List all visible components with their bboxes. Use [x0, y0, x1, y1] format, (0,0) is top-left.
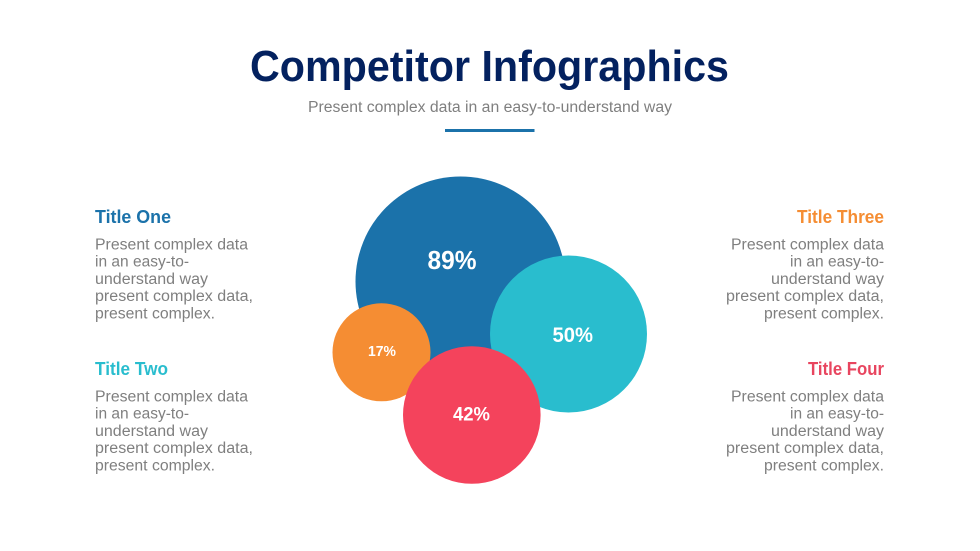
panel: title three [726, 207, 884, 322]
text block: title four: understand way [771, 423, 884, 440]
bubble chart [332, 176, 647, 484]
subtitle: Present complex data in an easy-to-understand way [308, 99, 672, 116]
header [250, 42, 729, 132]
text block: title two [95, 388, 253, 474]
text block: title four: present complex data, [726, 440, 884, 457]
text block: title three: Present complex data [731, 236, 884, 254]
accent rule [445, 129, 534, 132]
text block: title two: Present complex data [95, 388, 248, 406]
text block: title three: in an easy-to- [790, 254, 884, 271]
bubble: 50% [490, 256, 647, 412]
title: Competitor Infographics [250, 42, 729, 91]
text block: title one: in an easy-to- [95, 254, 189, 271]
bubble: 50%: 50% [552, 324, 593, 347]
text block: title three: understand way [771, 271, 884, 288]
text block: title four: in an easy-to- [790, 406, 884, 423]
text block: title four: present complex. [764, 457, 884, 474]
text block: title three [726, 236, 884, 322]
heading: title one: Title One [95, 207, 171, 227]
bubble: 42% [403, 346, 541, 484]
text block: title one: present complex. [95, 305, 215, 322]
text block: title one [95, 236, 253, 322]
text block: title four: Present complex data [731, 388, 884, 406]
text block: title four [726, 388, 884, 474]
heading: title four: Title Four [808, 359, 884, 379]
panel: title four [726, 359, 884, 474]
heading: title two: Title Two [95, 359, 168, 379]
panel: title two [95, 359, 253, 474]
text block: title two: in an easy-to- [95, 406, 189, 423]
bubble: 42%: 42% [453, 404, 490, 426]
bubble: 89% [356, 176, 566, 386]
text block: title two: present complex. [95, 457, 215, 474]
text block: title two: understand way [95, 423, 208, 440]
text block: title one: Present complex data [95, 236, 248, 254]
text block: title two: present complex data, [95, 440, 253, 457]
text block: title one: present complex data, [95, 288, 253, 305]
bubble: 89%: 89% [428, 245, 476, 275]
text block: title three: present complex data, [726, 288, 884, 305]
panel: title one [95, 207, 253, 322]
bubble: 17% [332, 303, 430, 401]
bubble: 17%: 17% [368, 343, 396, 360]
heading: title three: Title Three [797, 207, 884, 227]
text block: title one: understand way [95, 271, 208, 288]
text block: title three: present complex. [764, 305, 884, 322]
